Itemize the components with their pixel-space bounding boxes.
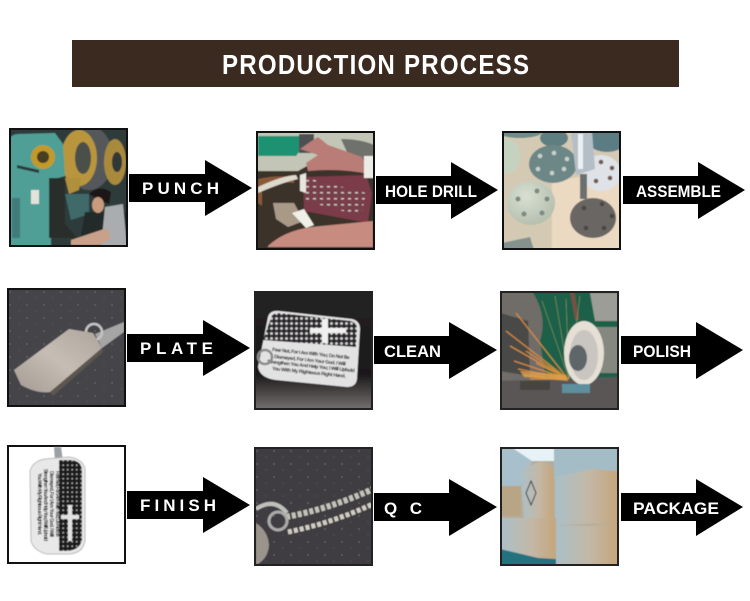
photo: stacked cardboard boxes [500, 447, 619, 566]
photo: drilled metal discs [502, 131, 621, 250]
arrow: hole drill: HOLE DRILL [385, 182, 477, 201]
photo: black and silver dog tag: Strengthen You And Help You; I Will Uphold [42, 469, 48, 541]
arrow: assemble: ASSEMBLE [636, 182, 721, 201]
photo: engraved dog tag with verse [254, 291, 373, 410]
arrow: punch [129, 160, 252, 216]
photo: punch press machine and operator [9, 126, 128, 247]
photo: wheat chain and tag on dark fabric [254, 447, 373, 566]
photo: blank steel dog tag [7, 288, 126, 407]
photo: black and silver dog tag: Fear Not, For I Am With You; Do Not Be [54, 471, 60, 537]
arrow: clean [374, 322, 497, 379]
arrow: plate: PLATE [140, 339, 213, 358]
photo: engraved dog tag with verse: Dismayed, For I Am Your God. I Will [274, 354, 347, 368]
arrow: polish [621, 322, 743, 379]
arrow: plate [127, 320, 250, 376]
arrow: qc: Q C [384, 499, 422, 518]
arrow: package [621, 479, 743, 536]
arrow: finish: FINISH [140, 496, 216, 515]
arrow: hole drill [376, 162, 498, 219]
photo: black and silver dog tag: Dismayed, For I Am Your God. I Will [48, 471, 54, 538]
title banner [72, 40, 679, 87]
arrow: punch: PUNCH [142, 179, 219, 198]
arrow: assemble [623, 162, 745, 219]
photo: black and silver dog tag: You With My Righteous Right Hand. [36, 473, 42, 536]
photo: grinding wheel with sparks [500, 290, 619, 410]
title: PRODUCTION PROCESS [222, 48, 529, 80]
arrow: clean: CLEAN [384, 342, 441, 361]
photo: black and silver dog tag [8, 446, 125, 563]
photo: engraved dog tag with verse: Fear Not, For I Am With You; Do Not Be [272, 347, 350, 361]
arrow: package: PACKAGE [633, 499, 719, 518]
photo: engraved dog tag with verse: Strengthen You And Help You; I Will Uphold [267, 359, 355, 374]
photo: engraved dog tag with verse: You With My Righteous Right Hand. [272, 366, 347, 380]
photo: drilling by hand [256, 131, 375, 250]
arrow: finish [127, 477, 250, 533]
arrow: polish: POLISH [633, 342, 691, 361]
arrow: qc [374, 479, 497, 536]
